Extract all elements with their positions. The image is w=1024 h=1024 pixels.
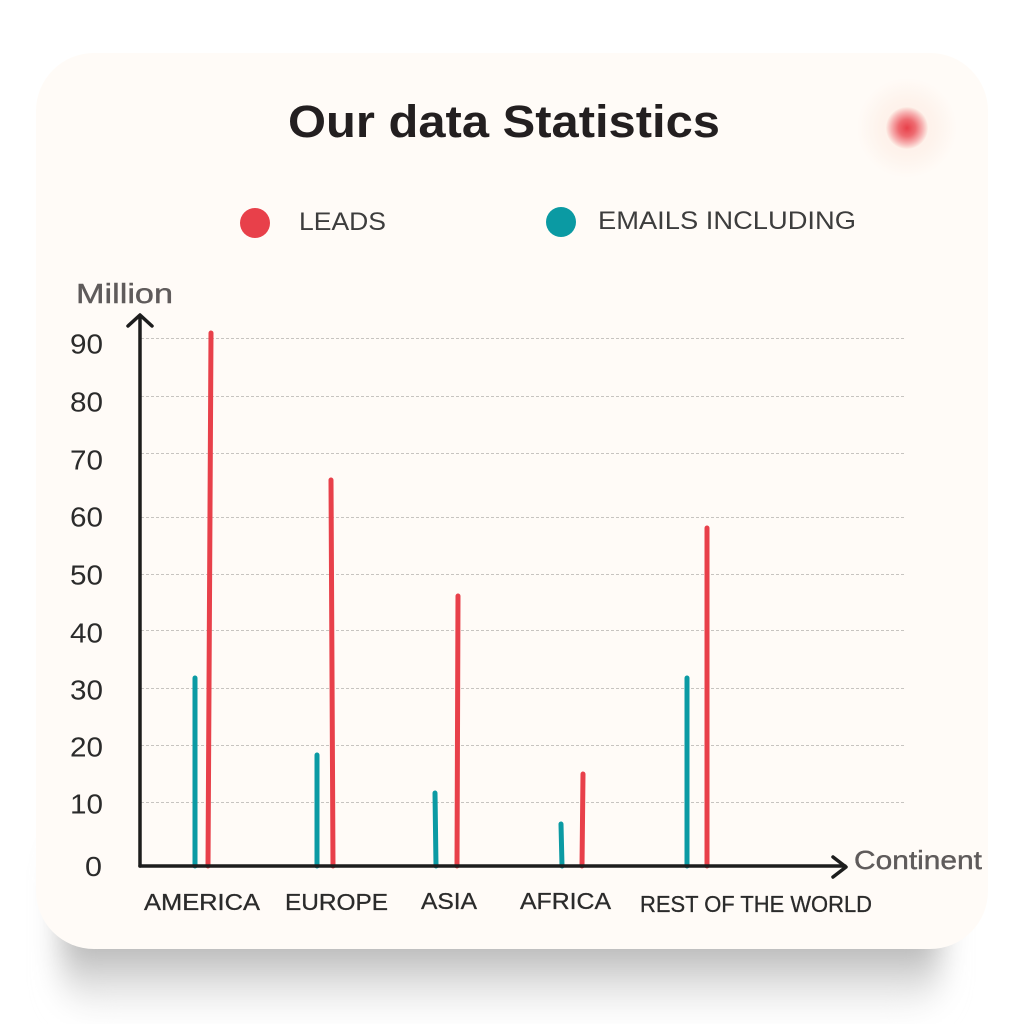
x axis labels: REST OF THE WORLD: [640, 891, 872, 917]
y axis labels: 70: [70, 444, 103, 476]
bars: america: [195, 333, 211, 866]
x axis labels: AMERICA: [144, 889, 261, 915]
y axis labels: 0: [85, 851, 102, 882]
icon: glowing red dot: [857, 78, 957, 178]
y axis labels: 10: [70, 788, 103, 820]
y axis labels: 40: [70, 618, 103, 648]
bars: africa: [561, 774, 583, 866]
bar chart: [195, 333, 707, 866]
legend: leads: LEADS: [299, 208, 386, 236]
x axis labels: AFRICA: [520, 888, 612, 914]
x axis labels: [144, 888, 872, 917]
y axis labels: 50: [70, 560, 103, 590]
y axis labels: 80: [70, 386, 103, 418]
x axis title: Continent: [854, 845, 983, 875]
x axis labels: ASIA: [421, 888, 478, 914]
axes: [128, 315, 846, 877]
x axis labels: EUROPE: [285, 889, 388, 915]
y axis labels: 60: [70, 502, 103, 532]
card shadow: [62, 840, 940, 1012]
y axis labels: 90: [70, 328, 103, 360]
legend: emails including: EMAILS INCLUDING: [598, 207, 856, 235]
legend: leads: [240, 208, 386, 238]
y axis title: Million: [76, 278, 173, 309]
y axis labels: [70, 328, 103, 882]
bars: asia: [435, 596, 458, 866]
bars: europe: [317, 480, 333, 866]
title: Our data Statistics: [288, 96, 720, 147]
bars: rest of the world: [687, 528, 707, 866]
y axis labels: 20: [70, 732, 103, 762]
legend: [240, 207, 856, 238]
y axis labels: 30: [70, 674, 103, 706]
